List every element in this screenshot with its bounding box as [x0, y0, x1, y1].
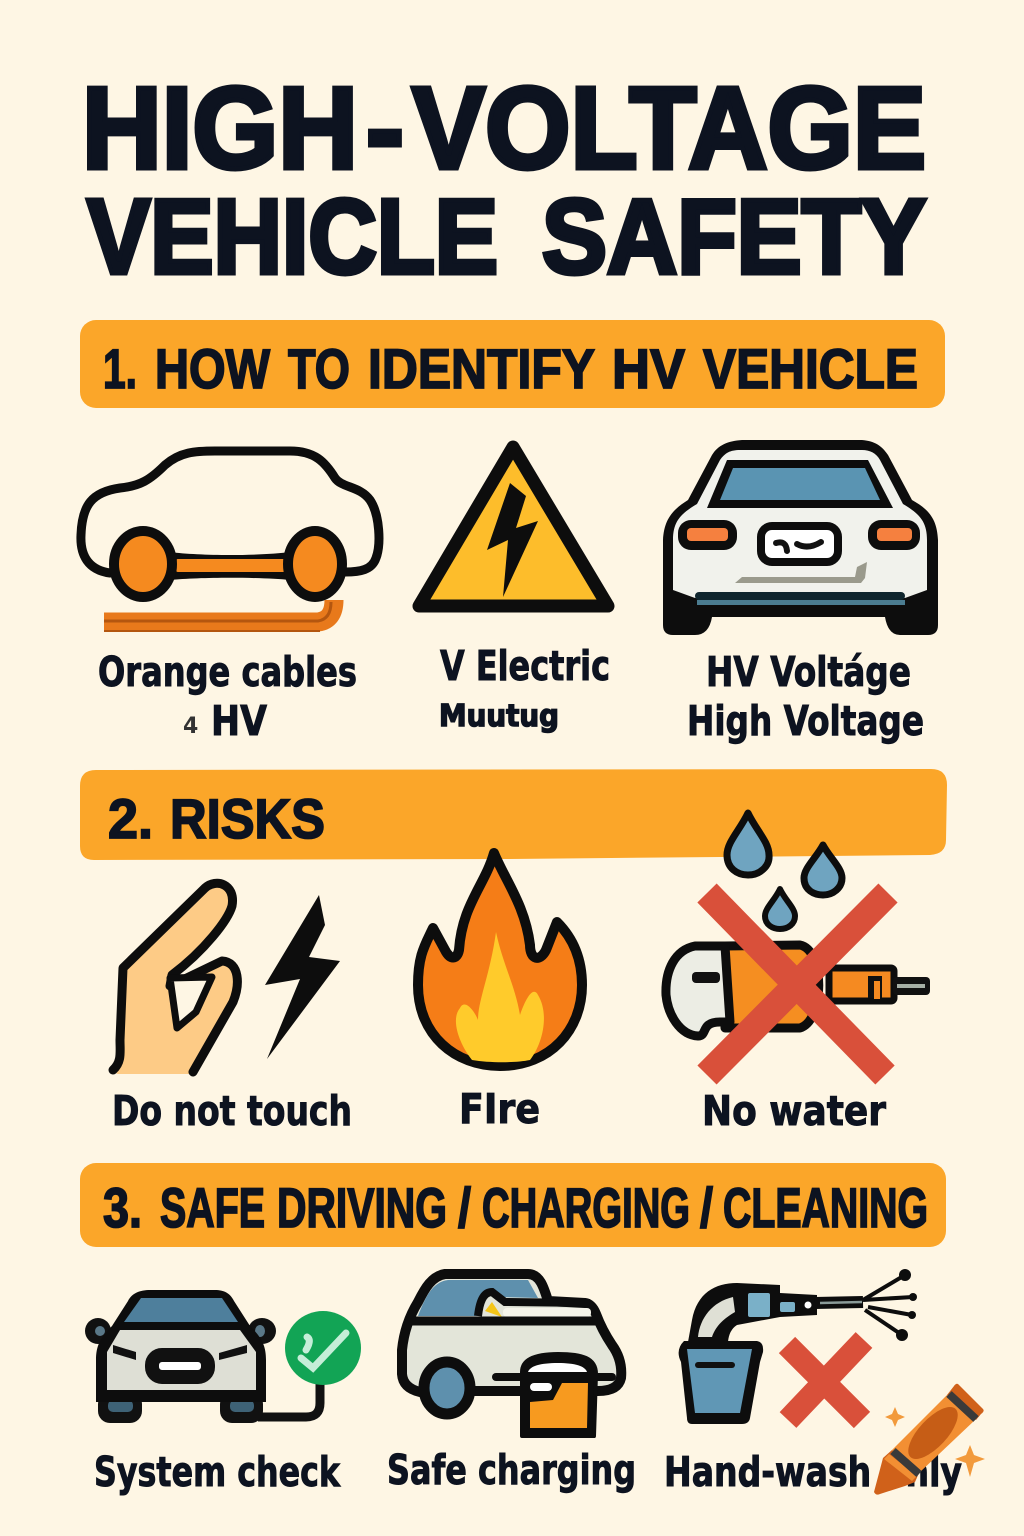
title: - [366, 63, 404, 193]
label: electric: Muutug [439, 699, 559, 734]
label: HV voltage [687, 648, 924, 745]
title [82, 63, 926, 296]
body [96, 1290, 266, 1402]
water drops [727, 813, 769, 875]
label: HV voltage: HV Voltáge [706, 648, 911, 696]
section header 3: DRIVING [277, 1176, 447, 1239]
label: orange cables: 4 [183, 714, 198, 739]
mirrors [85, 1318, 111, 1344]
icon: car outline with orange cables [81, 451, 379, 631]
section header 2 [80, 769, 947, 860]
section header 1: IDENTIFY [368, 337, 595, 400]
section header 3: 3. [103, 1176, 142, 1239]
section header 1 [80, 320, 945, 408]
label: no water: No water [702, 1087, 887, 1135]
title: HIGH [82, 63, 358, 193]
section header 1: TO [288, 337, 350, 400]
label: electric: V Electric [440, 642, 610, 690]
label: fire: FIre [459, 1085, 540, 1133]
icon: no water pressure washer [666, 813, 930, 1075]
icon: hand-wash sprayer and bucket [679, 1269, 917, 1424]
red cross [787, 1340, 864, 1420]
title: VOLTAGE [412, 63, 926, 193]
section header 2: 2. [108, 787, 153, 850]
section header 3: CLEANING [723, 1176, 928, 1239]
section header 1: VEHICLE [703, 337, 918, 400]
section header 3: CHARGING [482, 1176, 690, 1239]
section header 2: RISKS [170, 787, 325, 850]
icon: system check car [85, 1290, 361, 1423]
icon: flame [418, 853, 582, 1066]
label: HV voltage: High Voltage [687, 697, 924, 745]
label: orange cables: Orange cables [98, 648, 357, 696]
hose [688, 1283, 817, 1342]
wheels [98, 1392, 142, 1423]
section header 3: / [458, 1176, 471, 1239]
section header 1: 1. [103, 337, 137, 400]
icon: safe charging [402, 1274, 621, 1436]
label: orange cables: HV [211, 697, 267, 745]
label: do not touch: Do not touch [112, 1087, 352, 1135]
label: electric [439, 642, 610, 734]
cord [258, 1380, 320, 1417]
icon: do not touch hand and bolt [113, 883, 340, 1074]
section header 3: / [700, 1176, 713, 1239]
title: VEHICLE [87, 178, 498, 296]
label: hand-wash only: Hand-wash only [664, 1448, 962, 1496]
icon: warning triangle [419, 447, 608, 606]
washer body [725, 945, 819, 1028]
section header 3: SAFE [160, 1176, 265, 1239]
green check badge [285, 1311, 361, 1385]
section header 1: HV [612, 337, 685, 400]
bucket [679, 1341, 763, 1424]
icon: rear view car [663, 440, 938, 635]
section header 1: HOW [155, 337, 270, 400]
icon: crayon with sparkles [874, 1384, 985, 1495]
section header 3 [80, 1163, 946, 1247]
label: safe charging: Safe charging [387, 1446, 636, 1494]
label: system check: System check [94, 1448, 341, 1496]
red cross [707, 893, 888, 1075]
label: orange cables [98, 648, 357, 745]
title: SAFETY [542, 178, 926, 296]
